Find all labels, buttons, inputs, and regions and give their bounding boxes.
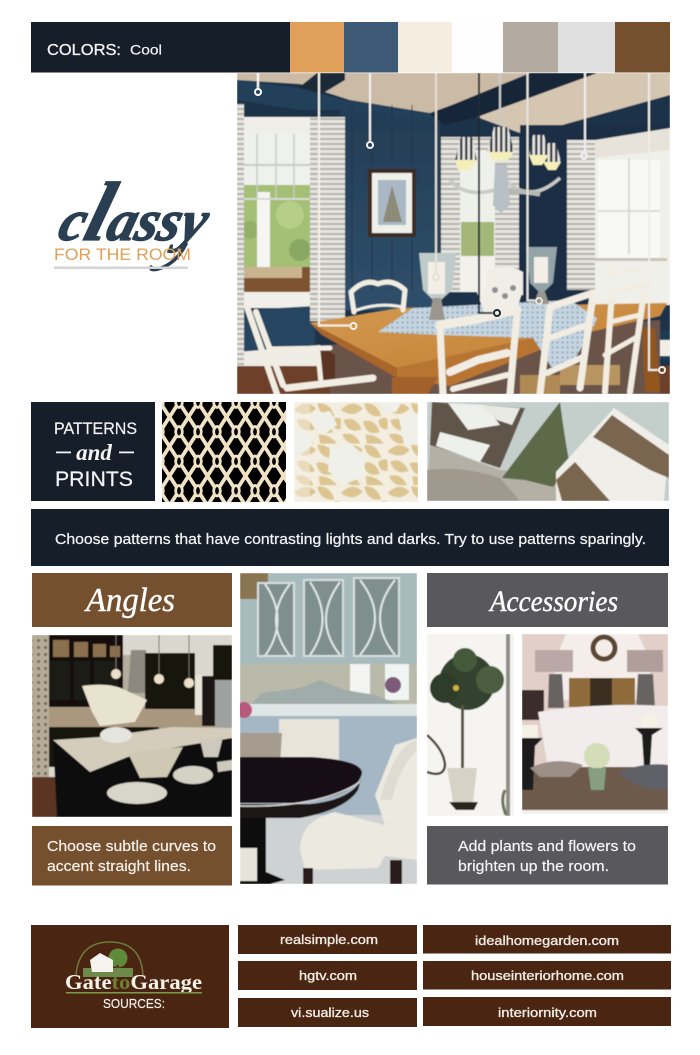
heading: accessories xyxy=(427,573,668,627)
hurricanes xyxy=(419,253,456,300)
swatch: cream xyxy=(398,22,452,72)
callout: angles tip: Choose subtle curves to xyxy=(47,839,216,855)
callout: angles tip: accent straight lines. xyxy=(47,859,191,875)
source: interiornity.com: interiornity.com xyxy=(498,1005,597,1020)
callout: accessories tip xyxy=(427,826,668,884)
photo: black kitchen xyxy=(32,635,232,817)
callout: accessories tip: Add plants and flowers to xyxy=(458,839,636,855)
swatch: light grey xyxy=(558,22,615,72)
source: vi.sualize.us xyxy=(238,998,417,1027)
photo: white sofa living room xyxy=(522,634,668,814)
wordmark: GatetoGarage xyxy=(65,970,202,994)
source: idealhomegarden.com xyxy=(423,925,671,954)
icon: gate to garage house logo xyxy=(76,942,143,977)
source: houseinteriorhome.com: houseinteriorhome.com xyxy=(471,968,624,983)
swatch: white xyxy=(452,22,503,72)
panel: patterns and prints heading xyxy=(31,402,155,501)
tip bar: patterns xyxy=(31,509,669,566)
panel: patterns and prints heading: PATTERNS xyxy=(54,420,137,438)
swatch: orange xyxy=(290,22,344,72)
table xyxy=(310,303,667,368)
source: hgtv.com: hgtv.com xyxy=(299,968,357,983)
center window xyxy=(441,137,519,292)
panel lines xyxy=(352,105,412,300)
source: hgtv.com xyxy=(238,961,417,990)
panel: patterns and prints heading: PRINTS xyxy=(55,468,133,491)
main dining room photo xyxy=(237,73,670,394)
colors bar xyxy=(31,22,670,72)
panel: patterns and prints heading: and xyxy=(76,440,112,465)
heading: angles xyxy=(32,573,232,627)
heading: angles: Angles xyxy=(84,582,175,619)
pattern swatch: trellis xyxy=(162,402,286,502)
right window xyxy=(567,140,595,290)
picture xyxy=(368,169,416,237)
source: houseinteriorhome.com xyxy=(423,961,671,990)
colors label: Cool xyxy=(130,42,162,58)
swatch: brown xyxy=(615,22,670,72)
photo: pale blue cabinets and round table xyxy=(240,573,417,884)
under table shadow xyxy=(330,320,660,394)
tip bar: patterns: Choose patterns that have contrasting lights and darks. Try to use patterns sparingly. xyxy=(55,531,646,548)
source: realsimple.com xyxy=(238,925,417,954)
source: vi.sualize.us: vi.sualize.us xyxy=(291,1005,370,1020)
callout: accessories tip: brighten up the room. xyxy=(458,859,609,875)
source: realsimple.com: realsimple.com xyxy=(280,932,378,947)
basket xyxy=(476,290,523,312)
left window xyxy=(243,117,313,134)
panel: gate to garage sources xyxy=(31,925,229,1028)
panel: gate to garage sources: SOURCES: xyxy=(103,996,165,1011)
classy logo title: FOR THE ROOM xyxy=(54,245,191,264)
runner xyxy=(378,300,597,368)
color marker dots xyxy=(255,89,665,373)
pattern swatch: leaves xyxy=(294,402,418,502)
connector lines xyxy=(258,73,658,370)
swatch: slate blue xyxy=(344,22,398,72)
classy logo title: classy xyxy=(51,166,224,259)
photo: potted tree xyxy=(427,634,514,816)
chandelier xyxy=(499,73,501,125)
photo: striped pillows xyxy=(427,402,669,501)
callout: angles tip xyxy=(32,826,232,886)
source: interiornity.com xyxy=(423,997,671,1026)
colors label xyxy=(31,22,290,72)
heading: accessories: Accessories xyxy=(488,585,618,618)
swatch: taupe xyxy=(503,22,558,72)
source: idealhomegarden.com: idealhomegarden.com xyxy=(475,933,619,948)
chairs xyxy=(247,271,646,394)
colors label: COLORS: xyxy=(47,42,121,59)
